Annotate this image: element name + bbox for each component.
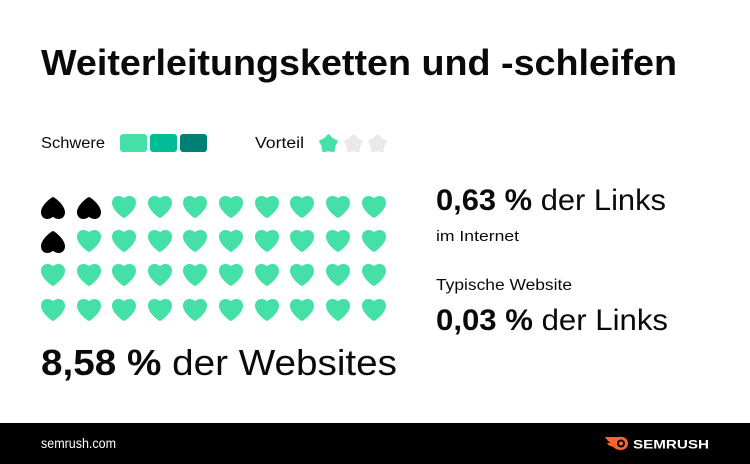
icon: flame [605,437,628,450]
stat: links on the internet: 0,63 % der Links [436,184,666,217]
legend: benefit [255,135,386,152]
logo: semrush [605,437,709,452]
benefit label: Vorteil [255,135,304,152]
severity swatch: light [120,134,147,152]
stat: websites: 8,58 % der Websites [41,342,397,383]
severity swatch: medium [150,134,177,152]
severity label: Schwere [41,135,105,152]
caption: typical website: Typische Website [436,277,572,294]
severity swatch: dark [180,134,207,152]
logo wordmark: SEMRUSH [633,438,709,452]
icon: filled star [320,136,337,151]
footer bar [0,423,750,464]
stat: links on typical website: 0,03 % der Links [436,304,668,337]
icon: empty star [369,136,386,151]
icon: empty star [345,136,362,151]
title: Weiterleitungsketten und -schleifen [41,42,677,83]
caption: im Internet: im Internet [436,228,520,245]
icon chart: hearts [41,196,386,321]
unaffected hearts [41,196,386,321]
footer url: semrush.com [41,436,116,451]
affected hearts [41,197,101,253]
legend: severity [41,134,207,152]
